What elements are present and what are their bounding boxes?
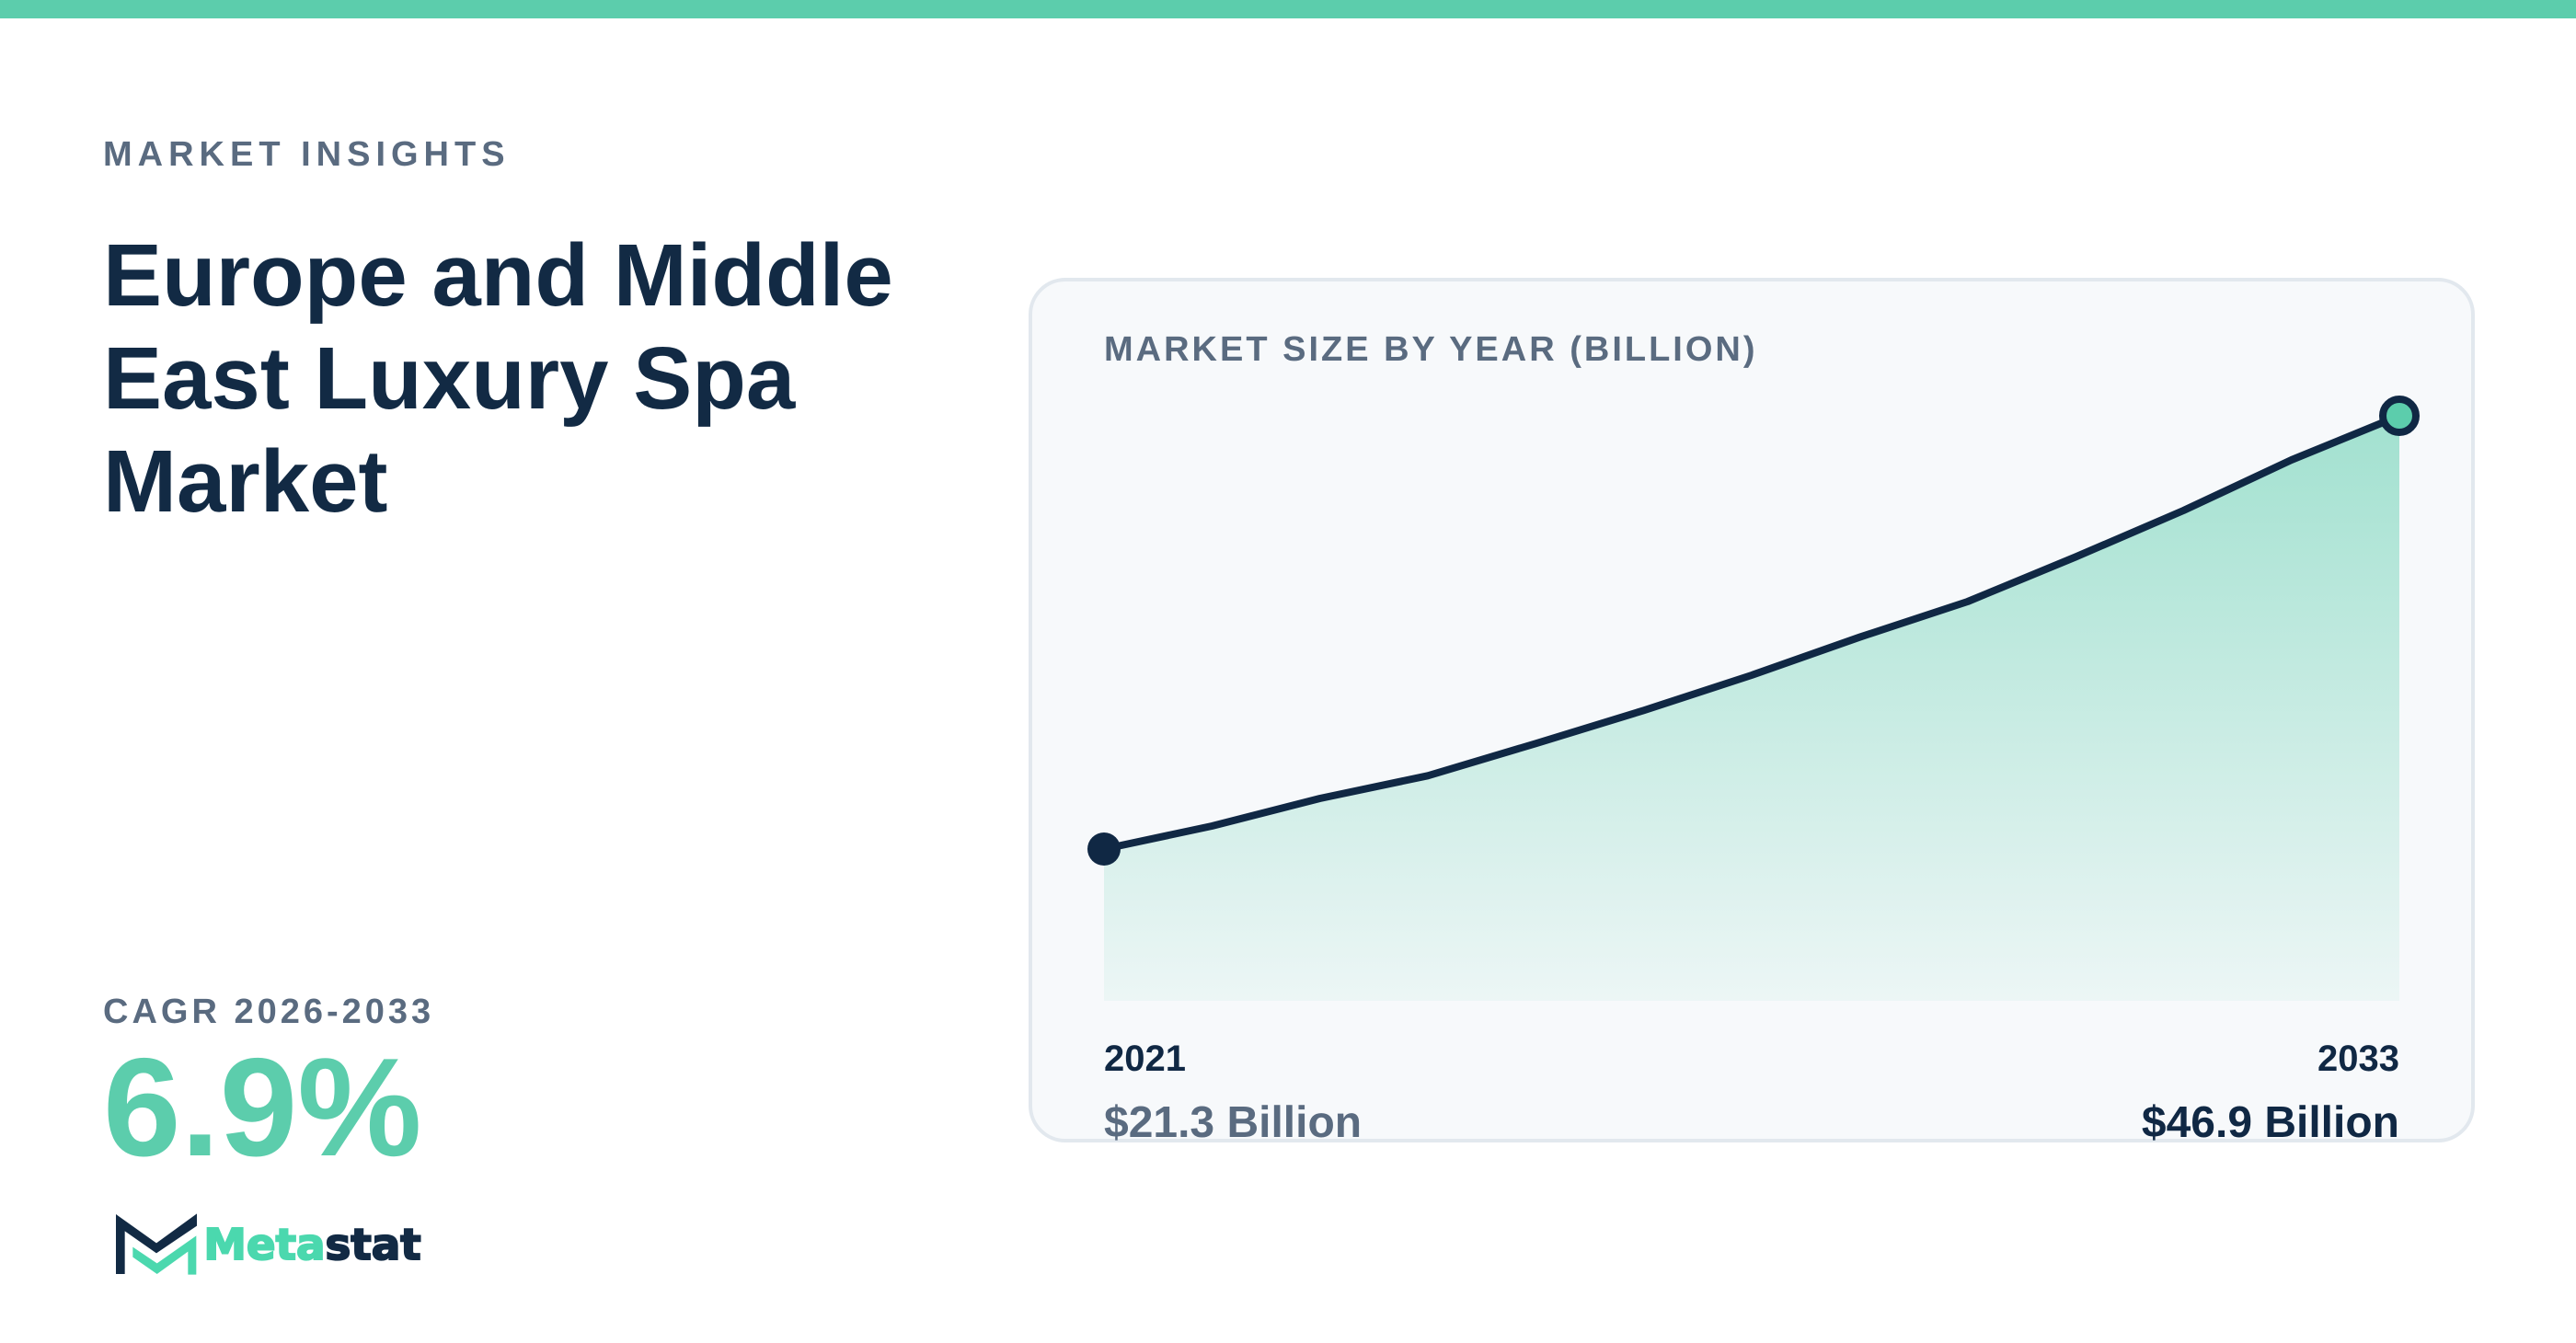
area fill: [1104, 416, 2399, 1001]
area line chart: [1087, 396, 2420, 1001]
eyebrow: market insights: MARKET INSIGHTS: [103, 135, 511, 174]
title: East Luxury Spa: [103, 329, 795, 428]
title: [103, 226, 893, 531]
chart heading: MARKET SIZE BY YEAR (BILLION): [1104, 330, 1758, 369]
logo wordmark: Metastat: [203, 1220, 421, 1269]
CAGR label: CAGR 2026-2033: [103, 993, 434, 1031]
title: Market: [103, 432, 387, 531]
top accent bar: [0, 0, 2576, 18]
logo: Metastat: [116, 1213, 421, 1275]
end year: 2033: [2317, 1039, 2399, 1079]
title: Europe and Middle: [103, 226, 893, 325]
start year: 2021: [1104, 1039, 1186, 1079]
start point marker: [1087, 832, 1121, 866]
logo mark: navy M: [116, 1213, 197, 1274]
logo mark: green M: [132, 1235, 196, 1275]
end point marker: [2383, 399, 2416, 432]
panel: market size chart: [1029, 278, 2475, 1142]
end value: $46.9 Billion: [2142, 1098, 2399, 1147]
trend line: [1104, 416, 2399, 849]
start value: $21.3 Billion: [1104, 1098, 1362, 1147]
CAGR value: 6.9%: [103, 1029, 421, 1186]
